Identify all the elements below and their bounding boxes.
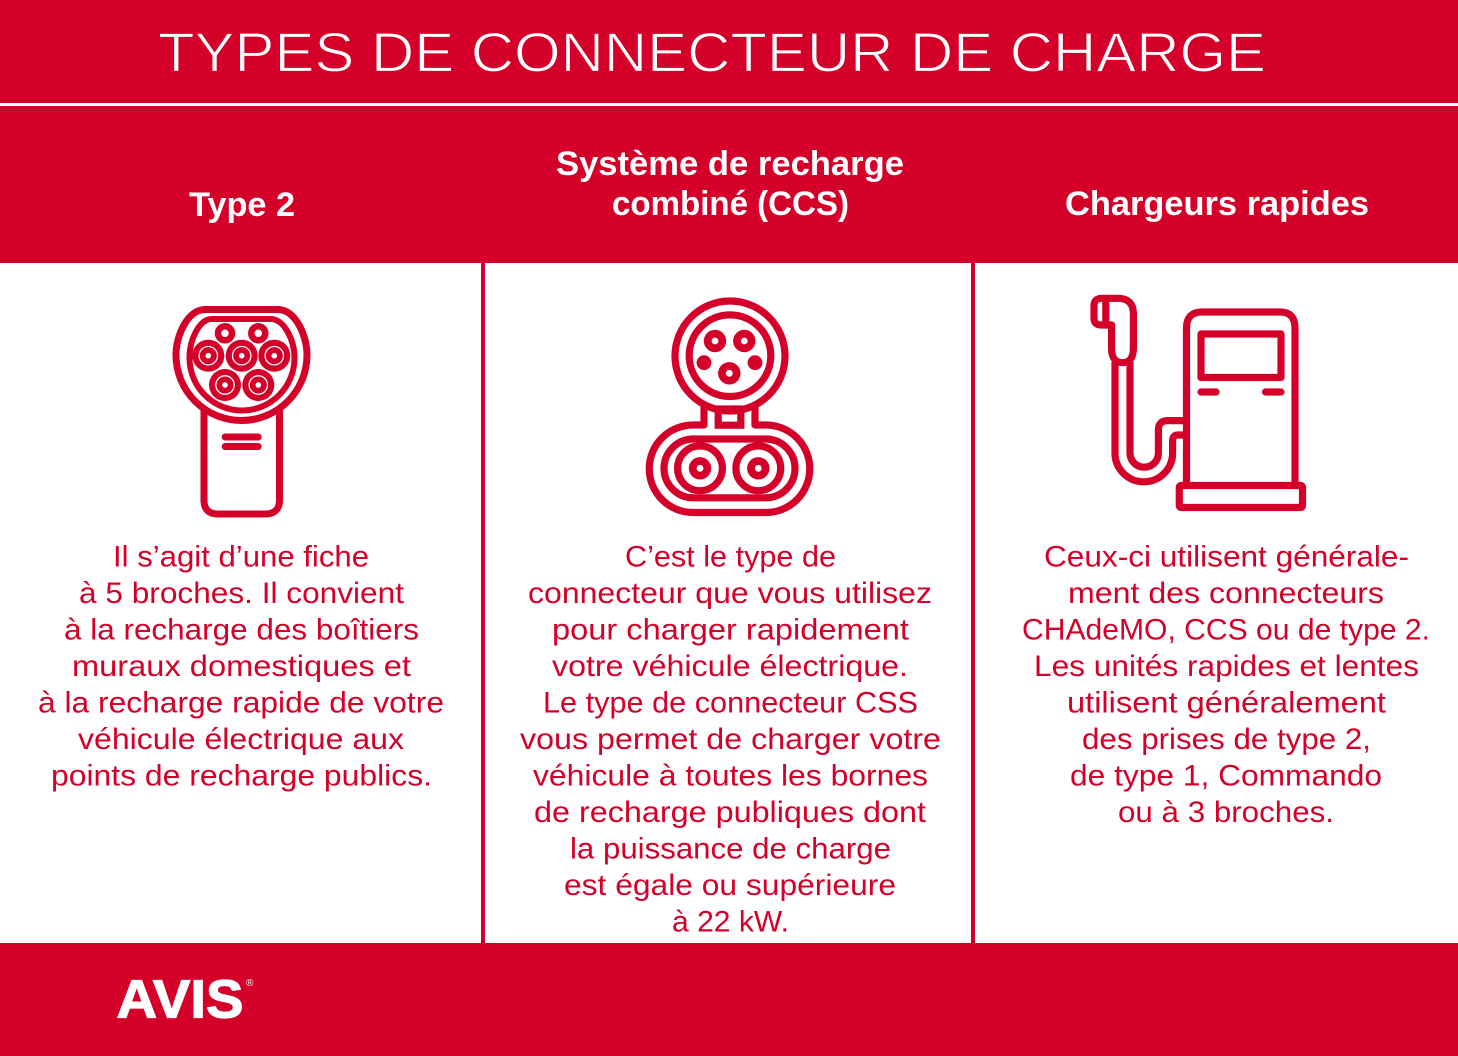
text block: fast chargers description: des prises de type 2, (1082, 723, 1371, 756)
text block: fast chargers description: ment des connecteurs (1068, 577, 1384, 610)
text block: fast chargers description: de type 1, Commando (1070, 760, 1382, 792)
text block: Type 2 description: à la recharge des boîtiers (64, 614, 419, 646)
text block: Type 2 description: véhicule électrique aux (78, 723, 404, 756)
text block: fast chargers description: Ceux-ci utilisent générale- (1044, 540, 1409, 574)
heading: Système de recharge combiné (CCS) (556, 145, 904, 223)
logo: AVIS: ® (246, 978, 254, 989)
text block: CCS description: votre véhicule électrique. (552, 650, 908, 683)
text block: Type 2 description: points de recharge publics. (51, 760, 432, 792)
text block: Type 2 description: à la recharge rapide de votre (38, 686, 444, 720)
text block: fast chargers description: Les unités rapides et lentes (1034, 650, 1419, 683)
heading: Chargeurs rapides: Chargeurs rapides (1065, 185, 1369, 223)
heading: Type 2: Type 2 (189, 186, 295, 224)
heading: Système de recharge combiné (CCS): Système de recharge (556, 145, 904, 183)
icon: fast charger station (1094, 298, 1302, 508)
text block: CCS description: pour charger rapidement (552, 614, 910, 646)
text block: CCS description: vous permet de charger votre (520, 723, 941, 756)
logo: AVIS: AVIS (116, 970, 244, 1030)
text block: fast chargers description: utilisent généralement (1067, 686, 1387, 720)
icon: CCS connector (649, 301, 810, 512)
text block: fast chargers description (1022, 540, 1430, 829)
text block: CCS description: de recharge publiques dont (534, 796, 927, 829)
text block: CCS description: C’est le type de (625, 540, 836, 574)
text block: Type 2 description: Il s’agit d’une fiche (113, 540, 369, 574)
icon: Type 2 connector (176, 310, 307, 514)
heading: Système de recharge combiné (CCS): combiné (CCS) (612, 185, 849, 223)
text block: fast chargers description: CHAdeMO, CCS ou de type 2. (1022, 614, 1430, 646)
text block: CCS description: véhicule à toutes les bornes (533, 760, 928, 792)
text block: CCS description: à 22 kW. (672, 906, 789, 938)
text block: CCS description: la puissance de charge (570, 832, 891, 866)
text block: CCS description: Le type de connecteur CSS (543, 686, 918, 720)
text block: Type 2 description (38, 540, 444, 792)
text block: CCS description: est égale ou supérieure (564, 869, 896, 902)
text block: Type 2 description: muraux domestiques et (72, 650, 412, 683)
text block: CCS description (520, 540, 941, 938)
text block: CCS description: connecteur que vous utilisez (528, 577, 932, 610)
text block: fast chargers description: ou à 3 broches. (1118, 796, 1334, 829)
title: TYPES DE CONNECTEUR DE CHARGE (158, 20, 1266, 84)
text block: Type 2 description: à 5 broches. Il convient (79, 577, 405, 610)
